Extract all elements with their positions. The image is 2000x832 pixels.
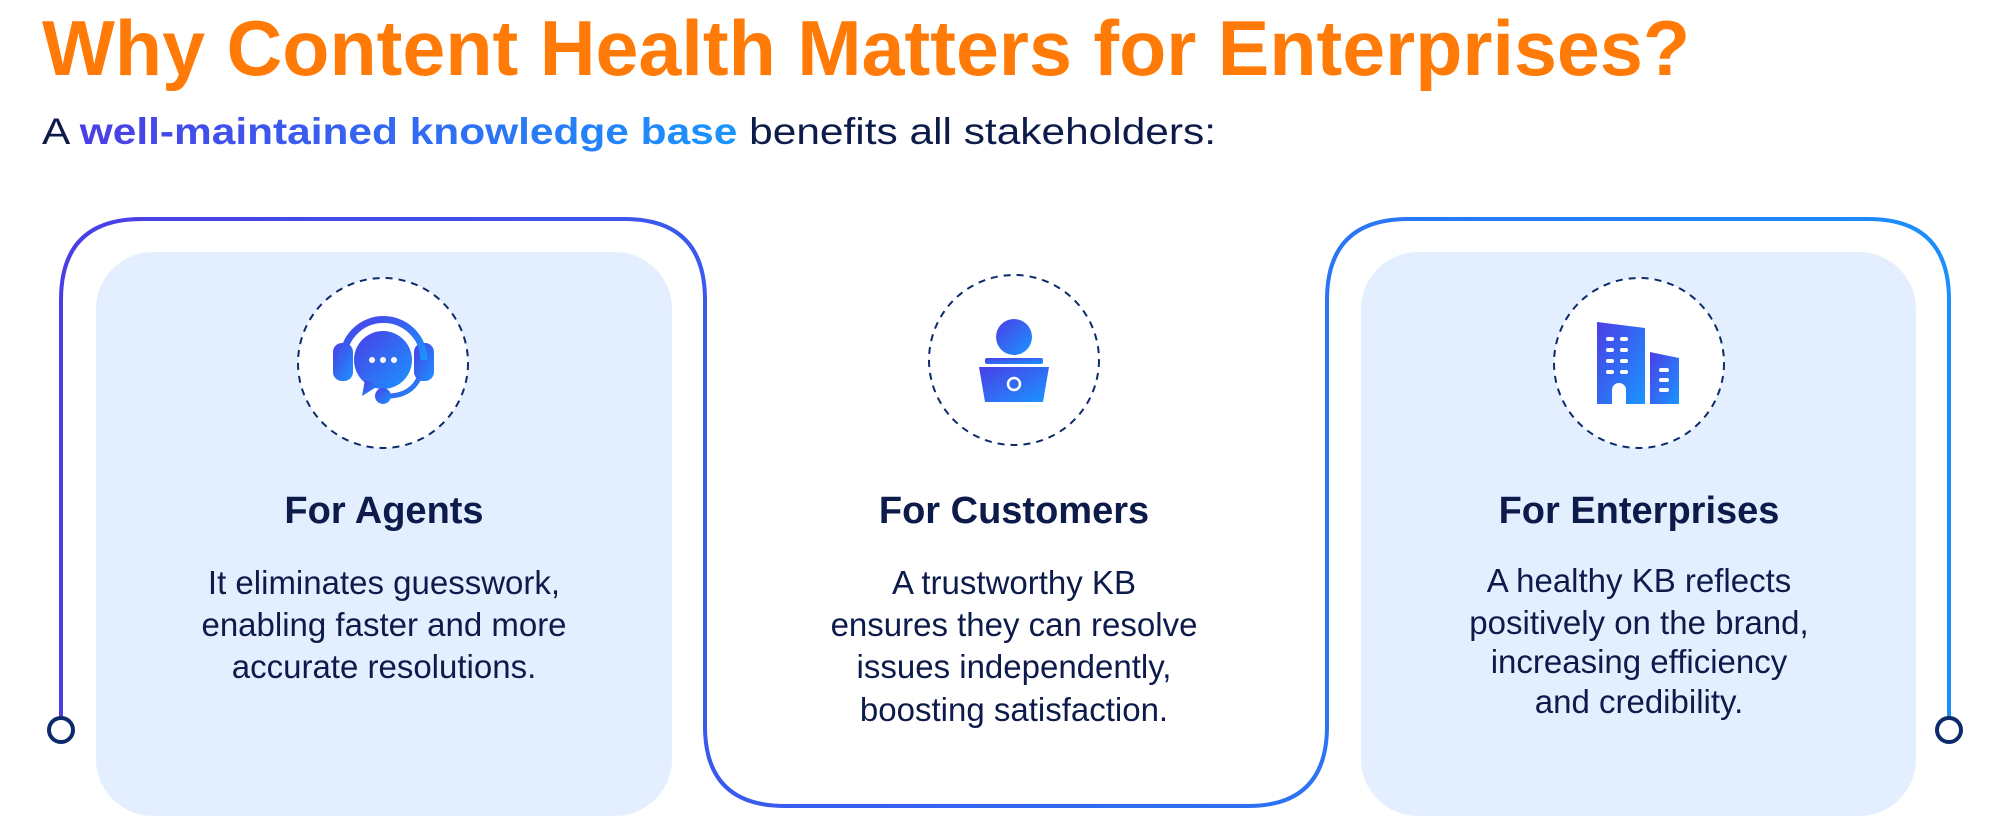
body text: increasing efficiency (1491, 643, 1788, 680)
body text: It eliminates guesswork, (208, 564, 560, 601)
body text: issues independently, (857, 648, 1171, 685)
body text: A healthy KB reflects (1487, 562, 1791, 599)
body text: positively on the brand, (1469, 604, 1809, 641)
heading: For Customers (879, 490, 1149, 532)
endpoint: right (1937, 718, 1961, 742)
icon: user laptop (929, 275, 1099, 445)
title: Why Content Health Matters for Enterprises? (42, 4, 1690, 92)
connector frame (61, 219, 1949, 806)
body text: A trustworthy KB (892, 564, 1136, 601)
icon: buildings (1554, 278, 1724, 448)
heading: For Enterprises (1499, 490, 1779, 532)
body text: enabling faster and more (201, 606, 567, 643)
heading: For Agents (284, 490, 484, 532)
icon: headset chat (298, 278, 468, 448)
panel: enterprises (1361, 252, 1916, 816)
body text: ensures they can resolve (831, 606, 1197, 643)
panel: agents (96, 252, 672, 816)
body text: and credibility. (1535, 683, 1743, 720)
body text: accurate resolutions. (232, 648, 536, 685)
body text: boosting satisfaction. (860, 691, 1168, 728)
subtitle: A well-maintained knowledge base benefits all stakeholders: (42, 111, 1216, 152)
panel: customers (831, 275, 1197, 728)
endpoint: left (49, 718, 73, 742)
